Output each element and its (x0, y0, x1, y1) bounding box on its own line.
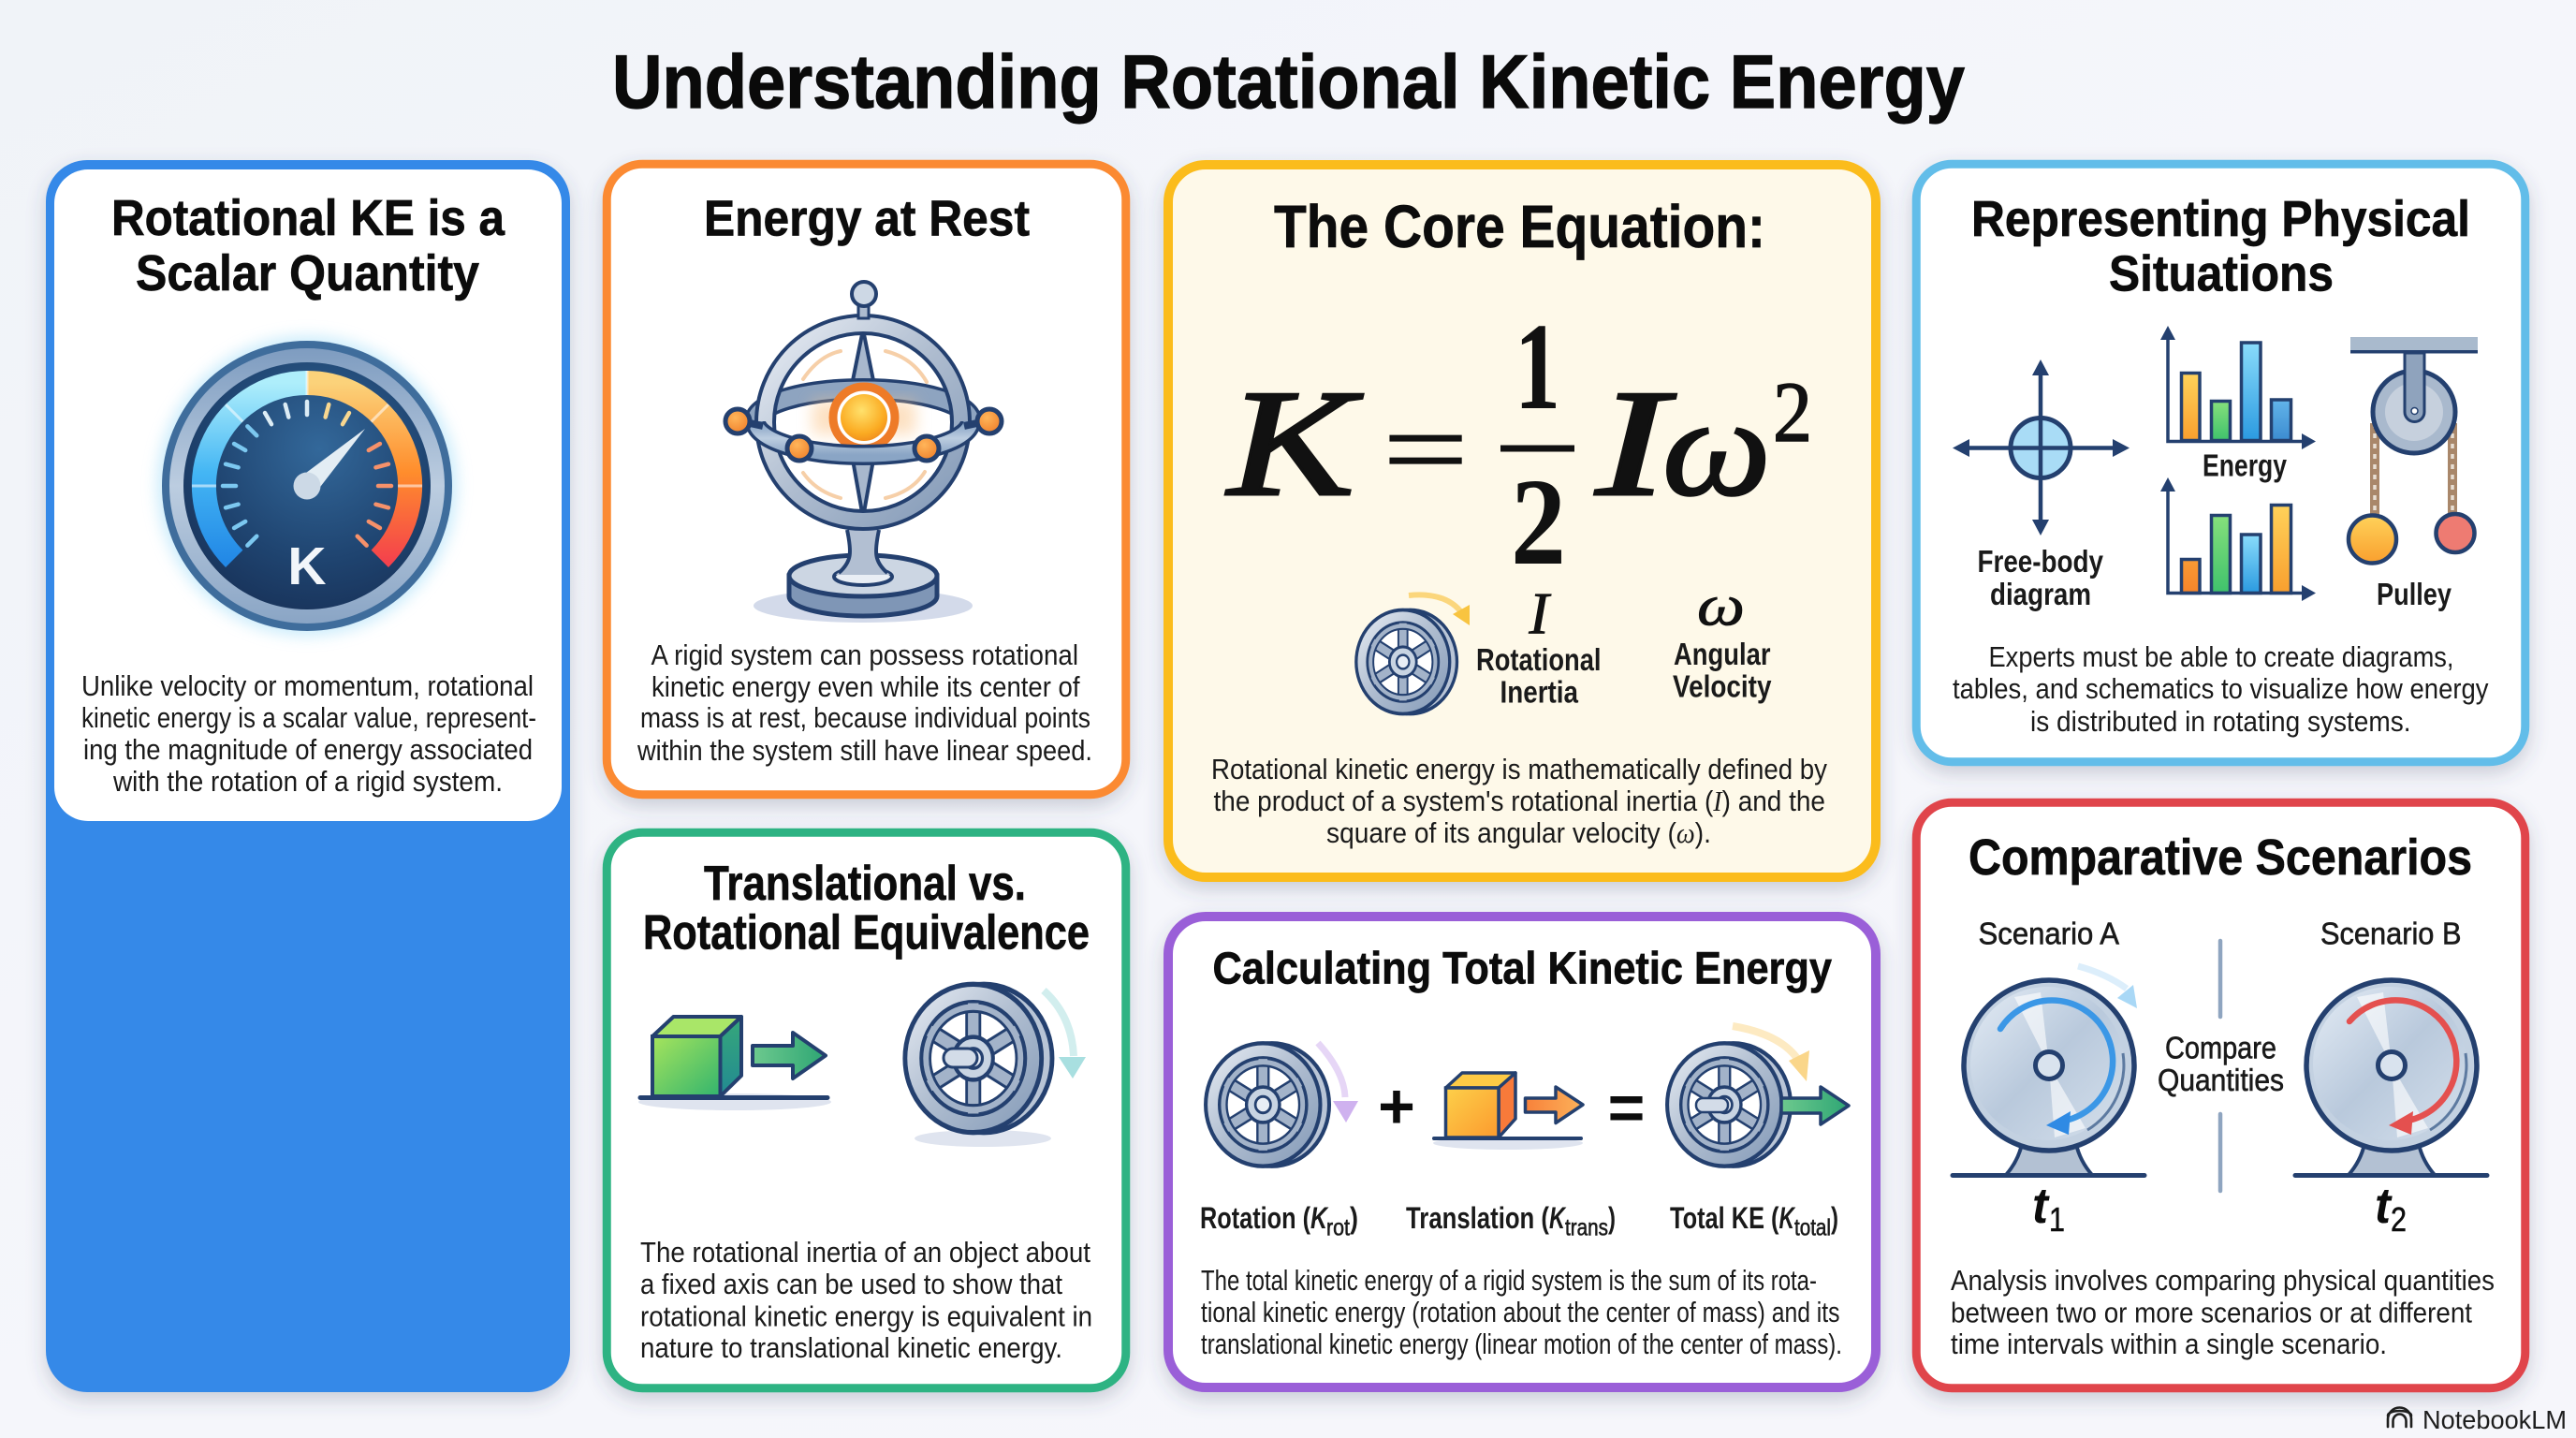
label: angular velocity: Velocity (1673, 668, 1772, 704)
text: equivalence description: nature to translational kinetic energy. (640, 1332, 1062, 1364)
icon: disc scenario A (1953, 966, 2144, 1176)
label: time t1 (2032, 1178, 2065, 1239)
heading: energy at rest: Energy at Rest (704, 191, 1030, 247)
label: translation: trans (1565, 1215, 1608, 1241)
label: translation: Translation ( (1406, 1201, 1549, 1235)
bar chart: second energy chart (2160, 477, 2316, 601)
text: comparison description: time intervals within a single scenario. (1951, 1328, 2387, 1360)
label: total KE: K (1778, 1201, 1796, 1235)
equation: K = 1/2 I omega squared: ω (1662, 370, 1771, 525)
bar chart: energy (2160, 326, 2316, 483)
icon: gyroscope (725, 282, 1002, 623)
text: equation description: Rotational kinetic energy is mathematically defined by (1211, 754, 1828, 785)
text: equivalence description (640, 1237, 1092, 1364)
heading: scalar quantity (111, 190, 505, 301)
label: time t2 (2375, 1178, 2407, 1239)
heading: representing physical situations: Situations (2109, 245, 2334, 301)
text: comparison description: between two or more scenarios or at different (1951, 1298, 2472, 1329)
plus sign: + (1378, 1071, 1415, 1142)
text: energy at rest description: within the system still have linear speed. (637, 735, 1092, 767)
divider with compare label: Compare (2165, 1030, 2276, 1065)
text: energy at rest description: mass is at rest, because individual points (640, 702, 1090, 734)
label: time t2: 2 (2391, 1200, 2407, 1239)
label: scenario B: Scenario B (2320, 916, 2462, 951)
panel: scalar quantity (46, 160, 570, 1392)
text: energy at rest description: A rigid system can possess rotational (651, 639, 1078, 671)
label: time t1: 1 (2049, 1200, 2065, 1239)
text: scalar quantity description: with the rotation of a rigid system. (112, 766, 503, 798)
heading: core equation: The Core Equation: (1274, 193, 1765, 260)
label: rotational inertia: I (1528, 580, 1551, 646)
label: free-body diagram (1977, 544, 2104, 611)
label: angular velocity: ω (1697, 575, 1745, 638)
label: angular velocity: Angular (1674, 637, 1771, 671)
heading: scalar quantity: Rotational KE is a (111, 190, 505, 246)
label: free-body diagram: diagram (1990, 577, 2091, 611)
equation: K = 1/2 I omega squared: K (1226, 360, 1363, 528)
label: translation: ) (1608, 1201, 1616, 1235)
equation: K = 1/2 I omega squared (1226, 297, 1812, 591)
text: total energy description: The total kinetic energy of a rigid system is the sum of its rota- (1201, 1265, 1817, 1297)
label: rotation: rot (1326, 1215, 1350, 1241)
text: total energy description (1201, 1265, 1842, 1360)
label: total KE: Total KE ( (1670, 1201, 1779, 1235)
icon: total wheel with arrows (1667, 1026, 1849, 1167)
text: equation description (1211, 754, 1828, 849)
text: comparison description: Analysis involves comparing physical quantities (1951, 1265, 2495, 1297)
text: energy at rest description: kinetic energy even while its center of (651, 671, 1080, 703)
text: comparison description (1951, 1265, 2495, 1360)
panel: energy at rest (607, 164, 1126, 795)
equation: K = 1/2 I omega squared: I (1595, 360, 1676, 528)
label: scenario A: Scenario A (1979, 916, 2119, 951)
icon: small wheel with arrow (1356, 594, 1470, 714)
divider with compare label: Quantities (2158, 1063, 2284, 1097)
label: time t2: t (2375, 1178, 2393, 1234)
label: pulley: Pulley (2377, 577, 2452, 611)
panel: translational vs rotational (607, 832, 1126, 1388)
bar chart: energy: Energy (2203, 448, 2288, 483)
equation: K = 1/2 I omega squared: 2 (1773, 364, 1812, 460)
text: representations description: Experts must be able to create diagrams, (1988, 641, 2454, 673)
text: scalar quantity description: kinetic energy is a scalar value, represent- (81, 702, 536, 734)
equals sign: = (1608, 1072, 1645, 1143)
heading: translational vs rotational: Translational vs. (704, 857, 1026, 911)
heading: translational vs rotational: Rotational Equivalence (643, 906, 1090, 961)
text: total energy description: tional kinetic energy (rotation about the center of mass) and its (1201, 1297, 1840, 1328)
label: angular velocity (1673, 575, 1772, 704)
text: equation description: square of its angular velocity (ω). (1326, 817, 1711, 849)
icon: speedometer gauge (157, 336, 457, 636)
label: translation: K (1549, 1201, 1567, 1235)
label: total KE: ) (1831, 1201, 1838, 1235)
icon: rotation wheel (1206, 1043, 1358, 1167)
text: equivalence description: rotational kinetic energy is equivalent in (640, 1301, 1092, 1333)
text: total energy description: translational kinetic energy (linear motion of the center of mass). (1201, 1328, 1842, 1360)
divider with compare label (2158, 941, 2284, 1191)
text: representations description: tables, and schematics to visualize how energy (1953, 673, 2489, 705)
text: representations description (1953, 641, 2489, 738)
heading: representing physical situations (1971, 191, 2470, 301)
label: rotational inertia: Inertia (1500, 674, 1579, 710)
heading: comparative scenarios: Comparative Scenarios (1969, 829, 2472, 886)
label: rotational inertia (1476, 580, 1601, 710)
panel: representing physical situations (1916, 164, 2525, 762)
label: rotation: Rotation ( (1200, 1201, 1310, 1235)
icon: orange cube with arrow (1433, 1073, 1583, 1150)
text: equivalence description: a fixed axis can be used to show that (640, 1269, 1062, 1300)
heading: scalar quantity: Scalar Quantity (136, 245, 479, 301)
notebooklm watermark: NotebookLM (2422, 1405, 2567, 1434)
icon: rolling wheel with rotation arrow (905, 984, 1086, 1147)
heading: representing physical situations: Representing Physical (1971, 191, 2470, 247)
icon: pulley (2349, 337, 2478, 564)
label: free-body diagram: Free-body (1977, 544, 2104, 579)
label: time t1: t (2032, 1178, 2050, 1234)
heading: total kinetic energy: Calculating Total Kinetic Energy (1213, 944, 1832, 994)
text: scalar quantity description (81, 670, 536, 798)
icon: free-body diagram (1953, 360, 2130, 536)
text: equation description: the product of a system's rotational inertia (I) and the (1213, 785, 1825, 817)
label: total KE (1670, 1201, 1838, 1241)
equation: K = 1/2 I omega squared: 2 (1511, 452, 1566, 591)
panel: comparative scenarios (1916, 802, 2525, 1388)
title: Understanding Rotational Kinetic Energy (612, 40, 1965, 125)
text: energy at rest description (637, 639, 1092, 767)
label: rotation: K (1310, 1201, 1329, 1235)
icon: green cube with arrow (638, 1017, 831, 1110)
label: rotation: ) (1350, 1201, 1358, 1235)
panel: core equation (1168, 165, 1876, 877)
text: scalar quantity description: ing the magnitude of energy associated (83, 734, 533, 766)
icon: disc scenario B (2295, 980, 2487, 1176)
text: equivalence description: The rotational inertia of an object about (640, 1237, 1090, 1269)
equation: K = 1/2 I omega squared: = (1383, 387, 1469, 511)
icon: speedometer gauge: K (287, 536, 327, 596)
heading: translational vs rotational (643, 857, 1090, 961)
label: total KE: total (1794, 1215, 1831, 1241)
text: scalar quantity description: Unlike velocity or momentum, rotational (81, 670, 534, 702)
equation: K = 1/2 I omega squared: 1 (1515, 297, 1560, 435)
label: rotational inertia: Rotational (1476, 642, 1601, 677)
text: representations description: is distributed in rotating systems. (2030, 706, 2411, 738)
panel: total kinetic energy (1168, 917, 1876, 1387)
